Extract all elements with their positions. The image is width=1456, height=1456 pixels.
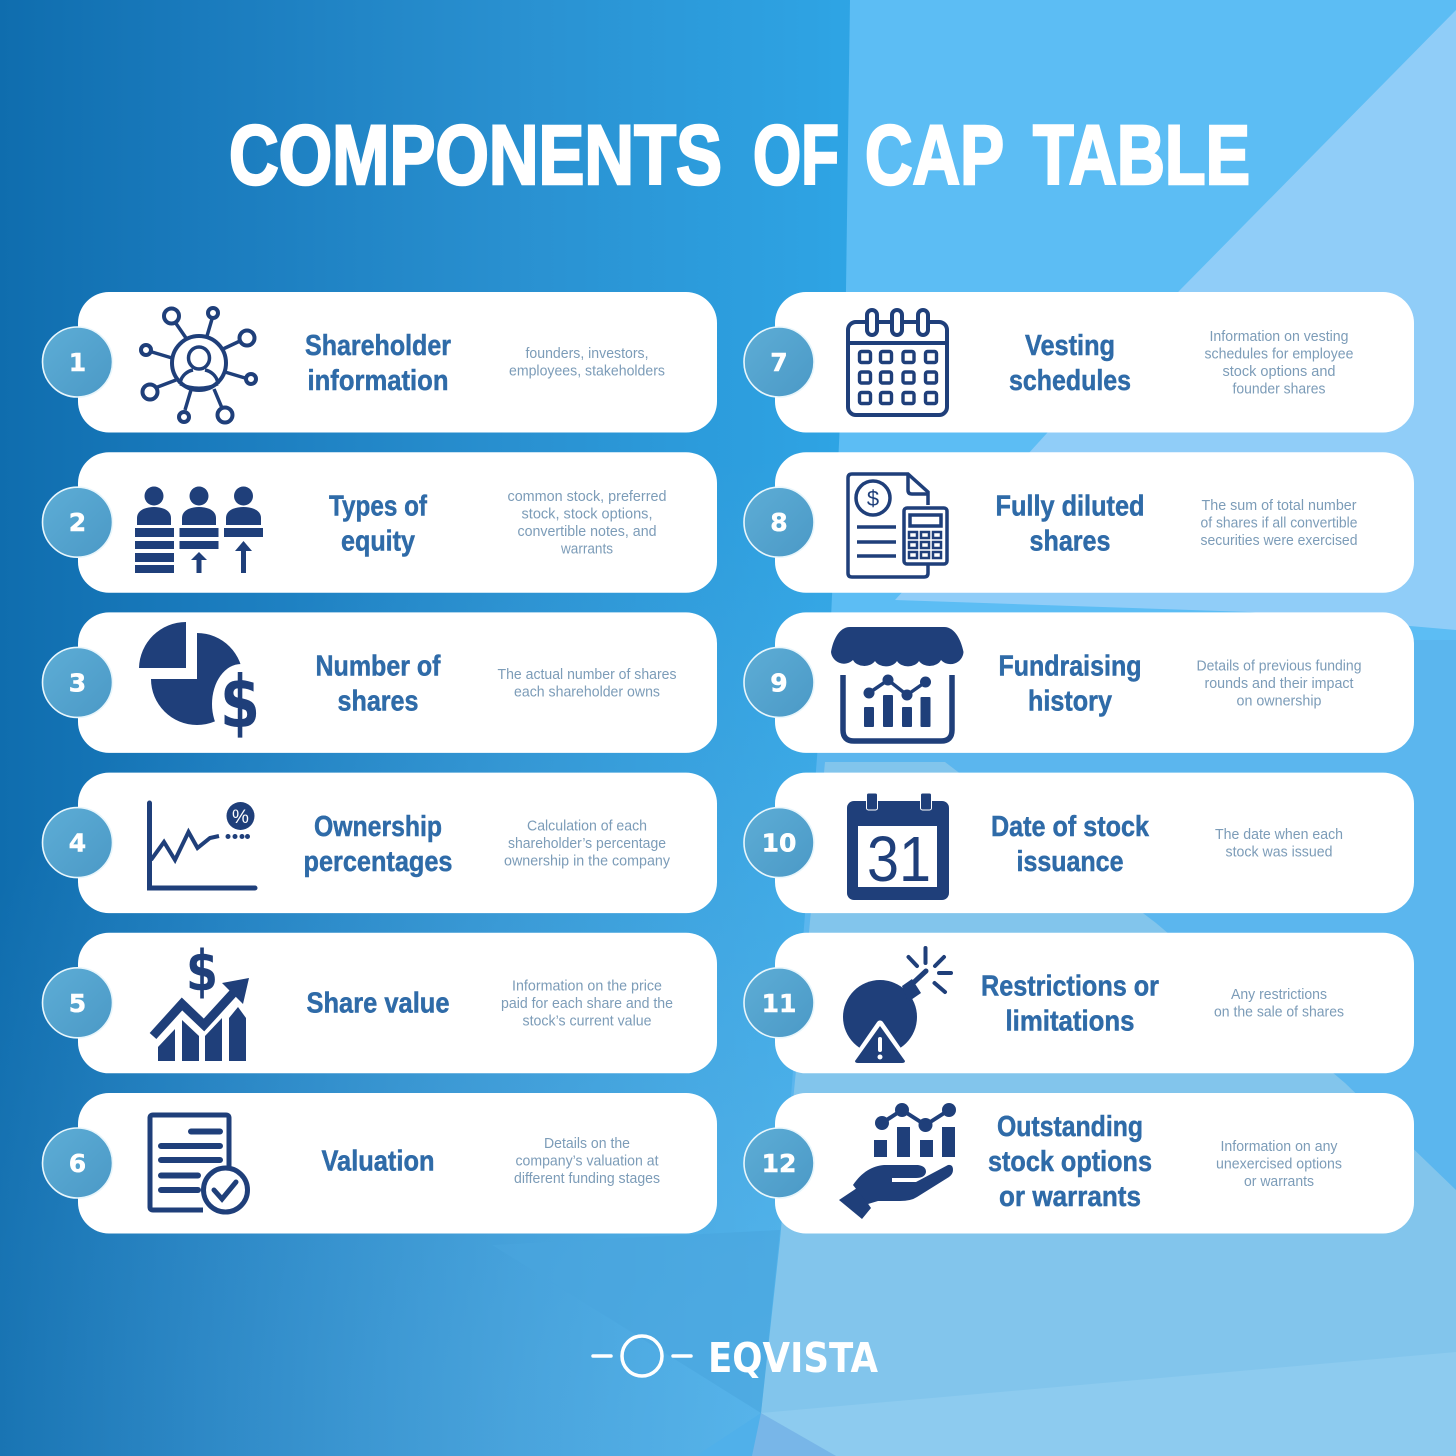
icon: pie chart with dollar: [139, 622, 270, 744]
description: schedules for employee: [1204, 346, 1354, 362]
number badge 5: 5: [69, 989, 86, 1018]
description: stock’s current value: [522, 1014, 652, 1030]
number badge 11: [744, 968, 814, 1038]
heading: Types of: [329, 490, 427, 522]
heading: [981, 970, 1159, 1038]
icon: document and calculator: $: [867, 486, 879, 511]
description: company’s valuation at: [516, 1154, 658, 1170]
title: [229, 108, 1250, 202]
heading: information: [308, 365, 448, 397]
number badge 7: 7: [770, 348, 788, 377]
heading: Share value: [306, 988, 450, 1020]
description: each shareholder owns: [514, 684, 660, 700]
panel: 10 date of stock issuance: [744, 773, 1414, 913]
heading: Valuation: [322, 1146, 434, 1178]
heading: Ownership: [314, 811, 442, 843]
description: of shares if all convertible: [1200, 516, 1358, 532]
description: common stock, preferred: [508, 489, 666, 505]
description: [501, 978, 673, 1030]
description: or warrants: [1244, 1174, 1314, 1190]
icon: ownership line chart with percent: %: [232, 807, 249, 828]
icon: bomb with warning triangle: [843, 948, 951, 1063]
description: The date when each: [1215, 827, 1343, 843]
icon: document and calculator: [848, 474, 947, 577]
heading: Vesting: [1025, 330, 1115, 362]
number badge 4: 4: [69, 829, 86, 858]
description: [508, 489, 666, 558]
number badge 9: [744, 647, 814, 717]
description: on the sale of shares: [1214, 1004, 1344, 1020]
number badge 10: [744, 808, 814, 878]
description: Information on vesting: [1210, 329, 1348, 345]
panel: 8 fully diluted shares: [744, 452, 1414, 593]
heading: [329, 490, 427, 558]
icon: shareholder network: [141, 308, 256, 422]
heading: history: [1028, 686, 1112, 718]
description: [1214, 987, 1344, 1020]
panel: 5 share value: [42, 933, 717, 1073]
icon: calendar page 31: 31: [867, 823, 931, 895]
description: ownership in the company: [504, 854, 671, 870]
description: warrants: [560, 542, 613, 558]
description: stock options and: [1222, 364, 1336, 380]
description: [1196, 658, 1362, 710]
description: on ownership: [1236, 694, 1322, 710]
description: stock was issued: [1226, 844, 1332, 860]
heading: stock options: [988, 1146, 1152, 1178]
description: [504, 818, 671, 870]
number badge 2: [42, 487, 112, 557]
title: CAP: [865, 108, 1004, 202]
icon: calendar: [848, 310, 947, 415]
description: shareholder’s percentage: [508, 836, 666, 852]
description: rounds and their impact: [1204, 676, 1354, 692]
heading: shares: [1030, 526, 1110, 558]
heading: Restrictions or: [981, 970, 1159, 1002]
description: The sum of total number: [1202, 498, 1357, 514]
description: Any restrictions: [1231, 987, 1327, 1003]
heading: limitations: [1006, 1006, 1134, 1038]
icon: valuation document with check: [150, 1115, 248, 1212]
description: convertible notes, and: [518, 524, 656, 540]
number badge 8: 8: [770, 508, 788, 537]
icon: people on share stacks: [135, 486, 263, 573]
icon: ownership line chart with percent: [150, 802, 255, 888]
number badge 2: 2: [69, 508, 86, 537]
description: employees, stakeholders: [509, 364, 665, 380]
description: [498, 667, 676, 700]
heading: Outstanding: [997, 1111, 1143, 1143]
heading: Number of: [316, 650, 441, 682]
heading: Shareholder: [305, 330, 451, 362]
number badge 6: 6: [69, 1149, 86, 1178]
panel: 9 fundraising history: [744, 612, 1414, 753]
panel: 3 number of shares: [42, 612, 717, 753]
heading: [304, 811, 452, 878]
description: [1216, 1139, 1342, 1190]
number badge 5: [42, 968, 112, 1038]
description: securities were exercised: [1200, 533, 1358, 549]
heading: percentages: [304, 846, 452, 878]
icon: dollar with rising arrow and bars: $: [186, 939, 218, 1004]
heading: equity: [341, 526, 415, 558]
description: different funding stages: [514, 1171, 660, 1187]
description: stock, stock options,: [522, 506, 652, 522]
heading: [991, 811, 1150, 878]
panel: 7 vesting schedules: [744, 292, 1414, 432]
description: paid for each share and the: [501, 996, 673, 1012]
description: Calculation of each: [527, 818, 647, 834]
heading: [1009, 330, 1131, 397]
icon: calendar page 31: [847, 793, 949, 900]
description: [1200, 498, 1358, 549]
panel: 1 shareholder information: [42, 292, 717, 432]
description: [1215, 827, 1343, 860]
heading: shares: [338, 686, 418, 718]
logo: Eqvista: [593, 1334, 878, 1382]
description: Information on the price: [512, 978, 662, 994]
heading: Fully diluted: [996, 490, 1144, 522]
title: OF: [753, 108, 839, 202]
heading: [998, 650, 1142, 718]
number badge 9: 9: [770, 668, 788, 697]
heading: [316, 650, 441, 718]
description: [509, 346, 665, 380]
heading: issuance: [1016, 846, 1124, 878]
description: Information on any: [1220, 1139, 1338, 1155]
number badge 12: 12: [762, 1149, 796, 1178]
title: TABLE: [1033, 108, 1250, 202]
description: The actual number of shares: [498, 667, 676, 683]
number badge 8: [744, 487, 814, 557]
number badge 10: 10: [762, 829, 796, 858]
icon: storefront with chart: [831, 627, 964, 741]
description: founder shares: [1232, 382, 1326, 398]
icon: pie chart with dollar: $: [220, 660, 260, 744]
panel: 4 ownership percentages: [42, 773, 717, 913]
description: [1204, 329, 1354, 398]
heading: Date of stock: [991, 811, 1150, 843]
number badge 11: 11: [762, 989, 796, 1018]
panel: 6 valuation: [42, 1093, 717, 1234]
icon: hand holding chart: [839, 1103, 956, 1219]
number badge 1: [42, 327, 112, 397]
panel: 11 restrictions or limitations: [744, 933, 1414, 1073]
panel: 12 outstanding stock options or warrants: [744, 1093, 1414, 1234]
title: COMPONENTS: [229, 108, 722, 202]
number badge 12: [744, 1128, 814, 1198]
description: Details on the: [544, 1136, 630, 1152]
description: founders, investors,: [526, 346, 648, 362]
description: Details of previous funding: [1196, 658, 1362, 674]
panel: 2 types of equity: [42, 452, 717, 593]
number badge 3: 3: [69, 668, 86, 697]
heading: [988, 1111, 1152, 1213]
heading: schedules: [1009, 365, 1131, 397]
heading: or warrants: [999, 1181, 1141, 1213]
number badge 3: [42, 647, 112, 717]
heading: [996, 490, 1144, 558]
icon: dollar with rising arrow and bars: [153, 939, 249, 1061]
number badge 1: 1: [69, 348, 86, 377]
description: [514, 1136, 660, 1187]
logo: Eqvista: EQVISTA: [708, 1334, 878, 1382]
description: unexercised options: [1216, 1156, 1342, 1172]
number badge 4: [42, 808, 112, 878]
number badge 6: [42, 1128, 112, 1198]
heading: [305, 330, 451, 397]
heading: Fundraising: [998, 650, 1142, 682]
number badge 7: [744, 327, 814, 397]
